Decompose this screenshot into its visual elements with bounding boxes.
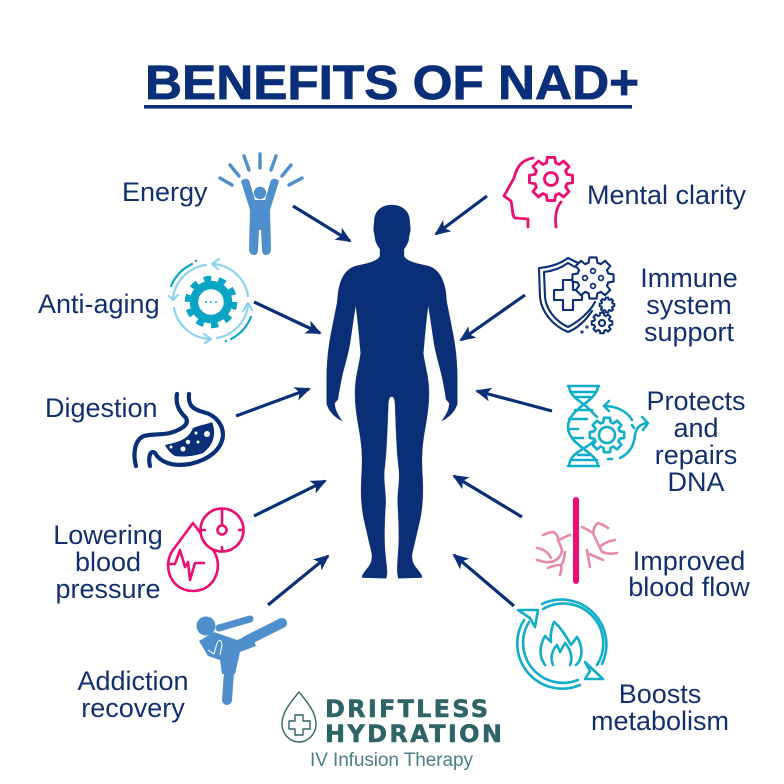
- logo tagline: IV Infusion Therapy: [310, 750, 474, 771]
- label: lowering blood pressure: pressure: [55, 574, 161, 604]
- label: immune system support: Immune: [640, 263, 738, 293]
- label: improved blood flow: blood flow: [628, 572, 750, 602]
- label: protects and repairs DNA: repairs: [655, 440, 737, 470]
- icon: logo drop with cross: [282, 692, 316, 742]
- label: anti-aging: Anti-aging: [38, 289, 160, 319]
- icon: blood pressure: [168, 508, 244, 591]
- arrow: anti-aging: [254, 302, 320, 333]
- label: boosts metabolism: Boosts: [619, 679, 701, 709]
- arrow: immune system: [461, 295, 525, 340]
- arrow: blood pressure: [254, 481, 325, 516]
- icon: energy figure: [220, 154, 302, 255]
- arrow: digestion: [236, 389, 309, 416]
- label: lowering blood pressure: blood: [75, 547, 141, 577]
- human body silhouette: [327, 205, 457, 578]
- icon: blood vessels: [537, 500, 617, 581]
- arrow: mental clarity: [436, 196, 487, 234]
- label: improved blood flow: Improved: [633, 546, 745, 576]
- label: protects and repairs DNA: DNA: [667, 467, 725, 497]
- label: energy: Energy: [122, 177, 208, 207]
- label: protects and repairs DNA: Protects: [646, 386, 746, 416]
- arrow: metabolism: [454, 555, 514, 606]
- label: immune system support: support: [644, 317, 735, 347]
- arrow: blood flow: [454, 476, 522, 517]
- label: addiction recovery: Addiction: [77, 666, 189, 696]
- label: digestion: Digestion: [45, 393, 158, 423]
- icon: martial arts kick: [196, 616, 282, 700]
- icon: metabolism flame: [517, 600, 606, 689]
- logo wordmark line 2: HYDRATION: [325, 720, 502, 748]
- label: boosts metabolism: metabolism: [591, 706, 729, 736]
- arrow: addiction recovery: [268, 556, 328, 605]
- label: addiction recovery: recovery: [81, 693, 185, 723]
- icon: shield with virus: [539, 257, 614, 333]
- label: protects and repairs DNA: and: [673, 413, 719, 443]
- logo: Driftless Hydration: [282, 692, 502, 771]
- logo wordmark: DRIFTLESS: [325, 695, 488, 723]
- arrow: DNA: [477, 391, 552, 411]
- arrow: energy: [293, 206, 350, 241]
- icon: stomach: [135, 394, 223, 466]
- icon: head with gear: [504, 157, 573, 227]
- title: BENEFITS OF NAD+: [145, 57, 639, 110]
- label: lowering blood pressure: Lowering: [53, 520, 163, 550]
- label: mental clarity: Mental clarity: [587, 180, 747, 210]
- label: immune system support: system: [646, 290, 732, 320]
- icon: DNA with gear: [568, 386, 648, 466]
- icon: anti-aging gear: [169, 259, 252, 343]
